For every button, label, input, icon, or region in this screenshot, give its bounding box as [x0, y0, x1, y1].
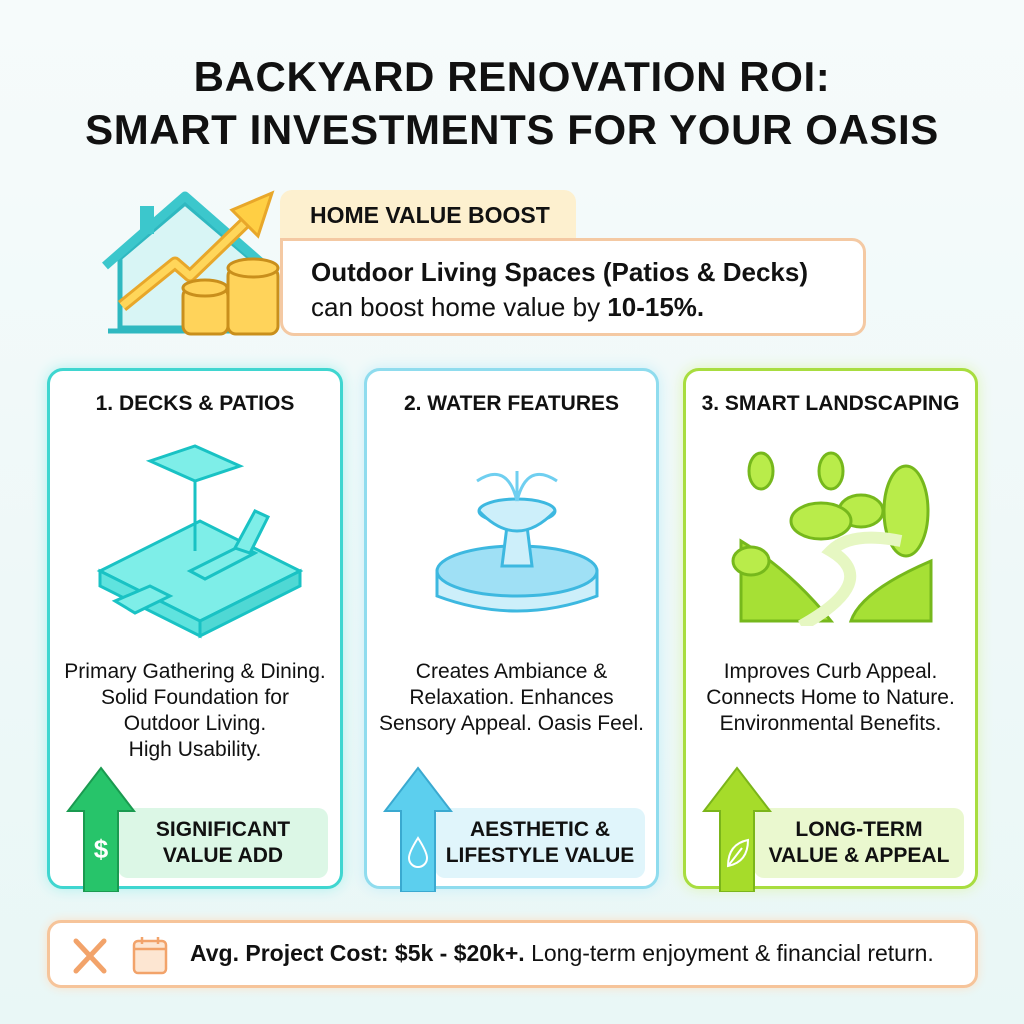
panel: decks & patios: [47, 368, 343, 889]
callout: home value text: can boost home value by 10-15%.: [311, 292, 704, 322]
arrow: blue up with drop: [383, 766, 453, 892]
icon: calendar: [132, 937, 168, 974]
description: Primary Gathering & Dining.: [64, 660, 326, 683]
description: Sensory Appeal. Oasis Feel.: [379, 712, 644, 735]
bottom bar: cost: [47, 920, 978, 988]
badge: aesthetic & lifestyle value: LIFESTYLE VALUE: [446, 844, 634, 867]
heading: 3. SMART LANDSCAPING: [702, 392, 959, 415]
title: [85, 53, 939, 153]
icon: house with rising arrow and coins: [102, 190, 280, 336]
description: Connects Home to Nature.: [706, 686, 955, 709]
description: Solid Foundation for: [101, 686, 289, 709]
tag: home value boost: HOME VALUE BOOST: [310, 202, 550, 228]
heading: 1. DECKS & PATIOS: [96, 392, 294, 415]
badge: significant value add: VALUE ADD: [163, 844, 283, 867]
cost text: Avg. Project Cost: $5k - $20k+. Long-term enjoyment & financial return.: [190, 940, 934, 966]
description: [64, 660, 326, 761]
badge: aesthetic & lifestyle value: [435, 808, 645, 878]
description: Improves Curb Appeal.: [724, 660, 937, 683]
title: SMART INVESTMENTS FOR YOUR OASIS: [85, 106, 939, 153]
arrow: green up with dollar: $: [94, 834, 109, 864]
callout: home value text: Outdoor Living Spaces (Patios & Decks): [311, 257, 808, 287]
badge: long-term value & appeal: VALUE & APPEAL: [769, 844, 949, 867]
panel: water features: [364, 368, 659, 889]
description: Creates Ambiance &: [416, 660, 607, 683]
icon: tools: [74, 938, 106, 974]
description: Relaxation. Enhances: [409, 686, 614, 709]
description: [706, 660, 955, 735]
callout: home value text: [280, 238, 866, 336]
badge: significant value add: [118, 808, 328, 878]
badge: long-term value & appeal: [754, 808, 964, 878]
description: High Usability.: [129, 738, 261, 761]
description: Outdoor Living.: [124, 712, 266, 735]
badge: long-term value & appeal: LONG-TERM: [795, 818, 923, 841]
arrow: lime up with leaf: [702, 766, 772, 892]
icon: deck with umbrella: [96, 444, 304, 638]
icon: fountain: [436, 471, 598, 612]
title: BACKYARD RENOVATION ROI:: [194, 53, 830, 100]
arrow: green up with dollar: [66, 766, 136, 892]
badge: significant value add: SIGNIFICANT: [156, 818, 290, 841]
heading: 2. WATER FEATURES: [404, 392, 619, 415]
description: Environmental Benefits.: [720, 712, 941, 735]
tag: home value boost: [280, 190, 576, 240]
description: [379, 660, 644, 735]
panel: smart landscaping: [683, 368, 978, 889]
badge: aesthetic & lifestyle value: AESTHETIC &: [470, 818, 610, 841]
icon: garden: [732, 452, 932, 626]
